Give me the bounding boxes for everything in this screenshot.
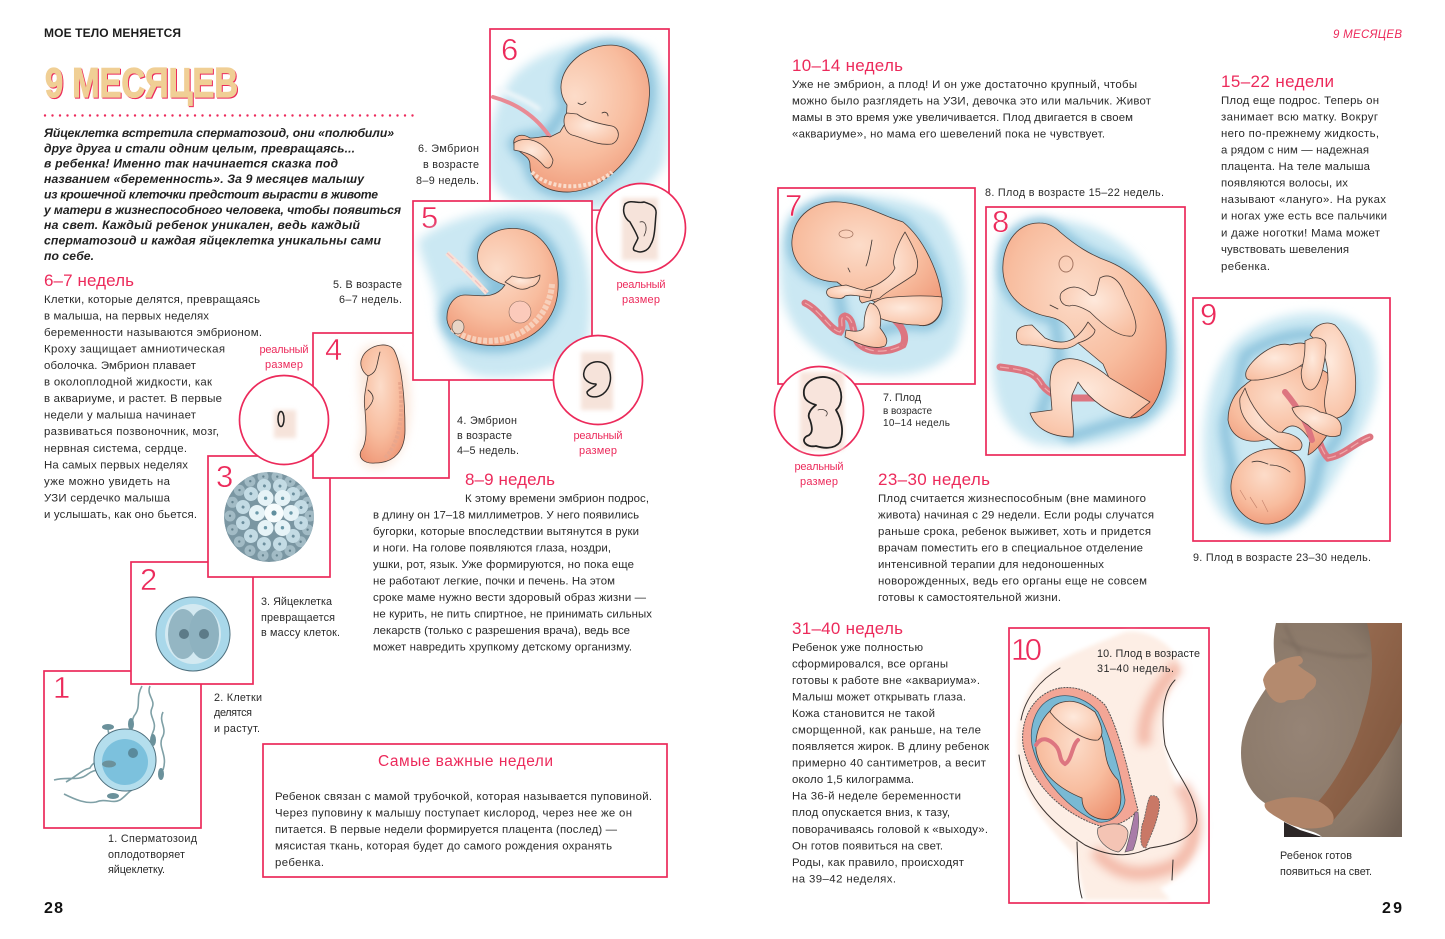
real size circle: fetus 7 xyxy=(774,366,864,456)
panel 8: fetus 15-22 weeks xyxy=(986,204,1185,455)
heading: 15-22 weeks: 15–22 недели xyxy=(1221,72,1334,91)
number 5: 5 xyxy=(421,200,438,235)
lower arm xyxy=(1016,322,1095,349)
caption 2: и растут. xyxy=(214,723,260,735)
text: 23-30 weeks xyxy=(878,493,1154,604)
text: 8-9 weeks: бугорки, которые впоследствии вытянутся в руки xyxy=(373,526,639,538)
text: 31-40 weeks: около 1,5 килограмма. xyxy=(792,774,914,786)
panel 6: embryo 8-9 weeks xyxy=(490,29,669,210)
caption 3: 3. Яйцеклетка xyxy=(261,596,332,608)
fetus legs and arms xyxy=(1246,343,1310,380)
text: 31-40 weeks: на 39–42 неделях. xyxy=(792,874,896,886)
real size label: embryo 5: размер xyxy=(579,445,617,457)
number 2: 2 xyxy=(140,562,157,597)
shirt xyxy=(1241,623,1402,837)
callout heading: Самые важные недели xyxy=(378,753,553,770)
photo caption xyxy=(1280,850,1372,878)
number 6: 6 xyxy=(501,32,518,67)
text: 23-30 weeks: интенсивной терапии для недоношенных xyxy=(878,559,1104,571)
caption 2: 2. Клетки xyxy=(214,692,262,704)
illustration: fetus 8 xyxy=(992,220,1178,446)
text: 23-30 weeks: живота) начиная с 29 недели. Если роды случатся xyxy=(878,510,1154,522)
caption 7: в возрасте xyxy=(883,406,932,417)
text: 6-7 weeks: беременности называются эмбрионом. xyxy=(44,327,262,339)
text: 6-7 weeks: в околоплодной жидкости, как xyxy=(44,376,213,388)
caption 1: 1. Сперматозоид xyxy=(108,833,198,845)
photo caption: Ребенок готов xyxy=(1280,850,1352,862)
real size label: embryo 6: размер xyxy=(622,294,660,306)
text: 10-14 weeks xyxy=(792,79,1152,140)
text: 8-9 weeks: не курить, не пить спиртное, не принимать сильных xyxy=(373,608,652,620)
panel 1: sperm and egg xyxy=(44,670,201,828)
umbilical cord xyxy=(805,303,905,351)
number 3: 3 xyxy=(216,459,233,494)
intro text: в ребенка! Именно так начинается сказка под xyxy=(44,157,338,171)
intro text: названием «беременность». За 9 месяцев малышу xyxy=(44,172,365,186)
caption 5: 6–7 недель. xyxy=(339,294,402,306)
text: 10-14 weeks: «аквариуме», но мама его шевелений пока не чувствует. xyxy=(792,128,1105,140)
real size circle: embryo 4 xyxy=(240,376,328,464)
text: 31-40 weeks xyxy=(792,642,990,886)
heading: 8-9 weeks: 8–9 недель xyxy=(465,470,555,489)
caption 3: в массу клеток. xyxy=(261,627,340,639)
text: 15-22 weeks: ребенка. xyxy=(1221,261,1270,273)
caption 4: 4. Эмбрион xyxy=(457,415,517,427)
callout text: мясистая ткань, которая будет до самого рождения охранять xyxy=(275,840,612,852)
illustration: embryo 4 xyxy=(359,345,410,468)
text: 15-22 weeks: него по-прежнему жидкость, xyxy=(1221,128,1379,140)
fetus body xyxy=(1003,223,1166,418)
text: 31-40 weeks: примерно 40 сантиметров, а весит xyxy=(792,758,987,770)
dotted divider xyxy=(45,114,420,117)
real size circle: embryo 5 xyxy=(554,336,642,424)
real size label: embryo 6 xyxy=(616,279,666,306)
text: 31-40 weeks: сформировался, все органы xyxy=(792,658,948,670)
real size label: embryo 4: реальный xyxy=(260,344,308,356)
text: 31-40 weeks: Малыш может открывать глаза. xyxy=(792,692,966,704)
real size label: fetus 7 xyxy=(794,461,844,488)
text: 31-40 weeks: появляется жирок. В длину ребенок xyxy=(792,741,990,753)
number 7: 7 xyxy=(785,188,802,223)
callout: most important weeks xyxy=(263,744,667,877)
page number 29: 29 xyxy=(1382,900,1402,917)
callout text: ребенка. xyxy=(275,857,324,869)
caption 7 xyxy=(883,392,950,429)
caption 4: в возрасте xyxy=(457,430,512,442)
intro text: друг друга и стали одним целым, превращаясь... xyxy=(44,141,355,155)
heading: 31-40 weeks: 31–40 недель xyxy=(792,619,903,638)
number 1: 1 xyxy=(53,670,70,705)
panel 9: fetus 23-30 weeks xyxy=(1193,297,1390,541)
caption 3: превращается xyxy=(261,612,335,624)
text: 6-7 weeks: развиваться позвоночник, мозг, xyxy=(44,426,219,438)
callout text xyxy=(275,791,652,869)
number 9: 9 xyxy=(1200,297,1217,332)
text: 15-22 weeks: и ногах уже есть все пальчики xyxy=(1221,210,1387,222)
real size circle: embryo 6 xyxy=(596,184,686,272)
text: 15-22 weeks: чувствовать шевеления xyxy=(1221,244,1349,256)
intro text: на свет. Каждый ребенок уникален, ведь каждый xyxy=(44,218,361,232)
text: 6-7 weeks: и услышать, как оно бьется. xyxy=(44,509,197,521)
text: 6-7 weeks: Кроху защищает амниотическая xyxy=(44,344,225,356)
caption 4: 4–5 недель. xyxy=(457,445,519,457)
fetus head xyxy=(1231,449,1305,524)
real size label: embryo 5: реальный xyxy=(574,430,622,442)
caption 10: 10. Плод в возрасте xyxy=(1097,648,1200,660)
intro text: из крошечной клеточки предстоит вырасти в животе xyxy=(44,187,378,201)
real size label: embryo 6: реальный xyxy=(616,279,666,291)
panel 7: fetus 10-14 weeks xyxy=(778,188,975,384)
text: 6-7 weeks: недели у малыша начинает xyxy=(44,410,197,422)
umbilical cord xyxy=(1000,367,1095,398)
caption 2: делятся xyxy=(214,707,252,719)
panel 5: embryo 6-7 weeks xyxy=(413,200,592,380)
illustration: egg xyxy=(54,686,164,803)
caption 7: 7. Плод xyxy=(883,392,922,404)
text: 15-22 weeks: называют «лануго». На руках xyxy=(1221,194,1386,206)
text: 8-9 weeks xyxy=(373,493,652,654)
text: 10-14 weeks: мамы в это время уже увеличивается. Плод двигается в своем xyxy=(792,112,1133,124)
text: 31-40 weeks: Кожа становится не такой xyxy=(792,708,935,720)
text: 6-7 weeks xyxy=(44,294,262,521)
heading: 10-14 weeks: 10–14 недель xyxy=(792,56,903,75)
photo: pregnant woman xyxy=(1241,623,1402,837)
panel 10: fetus 31-40 weeks xyxy=(1009,628,1209,903)
caption 10 xyxy=(1097,648,1200,675)
organs xyxy=(1141,796,1160,848)
text: 31-40 weeks: поворачиваясь головой к «выходу». xyxy=(792,824,988,836)
caption 8: 8. Плод в возрасте 15–22 недель. xyxy=(985,187,1164,199)
real size label: fetus 7: реальный xyxy=(794,461,844,473)
leg xyxy=(1030,359,1150,437)
illustration: dividing cell xyxy=(156,597,230,671)
caption 3 xyxy=(261,596,340,639)
illustration: embryo 6 xyxy=(490,40,669,210)
text: 15-22 weeks: и даже ноготки! Мама может xyxy=(1221,228,1381,240)
caption 7: 10–14 недель xyxy=(883,418,950,429)
illustration: pregnant cross-section xyxy=(1017,632,1197,900)
real size label: embryo 4 xyxy=(260,344,308,371)
text: 10-14 weeks: можно было разглядеть на УЗИ, девочка это или мальчик. Живот xyxy=(792,96,1152,108)
text: 15-22 weeks: занимает всю матку. Вокруг xyxy=(1221,112,1378,124)
intro text: у матери в жизнеспособного человека, чтобы появиться xyxy=(43,203,401,217)
callout text: питается. В первые недели формируется плацента (послед) — xyxy=(275,824,618,836)
number 10: 10 xyxy=(1011,632,1042,667)
page number 28: 28 xyxy=(44,900,63,917)
text: 6-7 weeks: УЗИ сердечко малыша xyxy=(44,492,171,504)
text: 8-9 weeks: К этому времени эмбрион подрос, xyxy=(465,493,649,505)
lower hand xyxy=(1265,797,1334,828)
intro text: по себе. xyxy=(44,249,94,263)
caption 1: яйцеклетку. xyxy=(108,864,165,876)
text: 6-7 weeks: Клетки, которые делятся, превращаясь xyxy=(44,294,260,306)
intro text: Яйцеклетка встретила сперматозоид, они «полюбили» xyxy=(43,126,394,140)
text: 23-30 weeks: Плод считается жизнеспособным (вне маминого xyxy=(878,493,1146,505)
text: 15-22 weeks: появляются волосы, их xyxy=(1221,178,1348,190)
callout text: Через пуповину к малышу поступает кислород, через нее же он xyxy=(275,808,632,820)
arm xyxy=(1314,623,1402,822)
text: 15-22 weeks: Плод еще подрос. Теперь он xyxy=(1221,95,1379,107)
upper hand xyxy=(1263,656,1316,703)
fetus body xyxy=(792,202,942,326)
title: 9 МЕСЯЦЕВ xyxy=(45,59,238,106)
panel 3: mass of cells xyxy=(208,456,330,577)
caption 1: оплодотворяет xyxy=(108,849,185,861)
fetus torso xyxy=(1228,366,1338,455)
illustration: morula xyxy=(224,471,316,562)
intro text xyxy=(43,126,401,263)
text: 6-7 weeks: в аквариуме, и растет. В первые xyxy=(44,393,222,405)
caption 6: 8–9 недель. xyxy=(416,175,479,187)
text: 6-7 weeks: в малыша, на первых неделях xyxy=(44,310,209,322)
text: 10-14 weeks: Уже не эмбрион, а плод! И он уже достаточно крупный, чтобы xyxy=(792,79,1137,91)
text: 6-7 weeks: На самых первых неделях xyxy=(44,460,188,472)
text: 8-9 weeks: лекарств (только с разрешения врача), ведь все xyxy=(373,625,630,637)
umbilical cord xyxy=(1318,434,1374,462)
text: 23-30 weeks: новорожденных, ведь его органы еще не совсем xyxy=(878,576,1147,588)
text: 6-7 weeks: уже можно увидеть на xyxy=(44,476,171,488)
text: 23-30 weeks: врачам поместить его в специальное отделение xyxy=(878,542,1143,554)
illustration: fetus 9 xyxy=(1204,313,1377,534)
heading: 23-30 weeks: 23–30 недель xyxy=(878,470,990,489)
text: 6-7 weeks: оболочка. Эмбрион плавает xyxy=(44,360,197,372)
callout text: Ребенок связан с мамой трубочкой, которая называется пуповиной. xyxy=(275,791,652,803)
caption 1 xyxy=(108,833,198,876)
text: 8-9 weeks: сроке маме нужно вести здоровый образ жизни — xyxy=(373,592,647,604)
real size label: fetus 7: размер xyxy=(800,476,838,488)
upper arm xyxy=(1060,276,1136,336)
running header right: 9 МЕСЯЦЕВ xyxy=(1333,29,1402,41)
illustration: fetus 7 xyxy=(780,196,965,375)
running header: МОЕ ТЕЛО МЕНЯЕТСЯ xyxy=(44,26,181,40)
text: 8-9 weeks: может навредить хрупкому детскому организму. xyxy=(373,642,632,654)
caption 6: 6. Эмбрион xyxy=(418,143,479,155)
heading: 6-7 weeks: 6–7 недель xyxy=(44,271,134,290)
caption 5: 5. В возрасте xyxy=(333,279,402,291)
text: 23-30 weeks: раньше срока, ребенок выживет, хоть и придется xyxy=(878,526,1151,538)
text: 31-40 weeks: На 36-й неделе беременности xyxy=(792,790,961,802)
text: 31-40 weeks: сморщенной, как раньше, на теле xyxy=(792,724,981,736)
text: 23-30 weeks: готовы к самостоятельной жизни. xyxy=(878,592,1061,604)
text: 31-40 weeks: Роды, как правило, происходят xyxy=(792,857,965,869)
caption 5 xyxy=(333,279,402,306)
text: 31-40 weeks: плод опускается вниз, к тазу, xyxy=(792,807,950,819)
caption 2 xyxy=(214,692,262,735)
number 4: 4 xyxy=(325,332,342,367)
real size label: embryo 4: размер xyxy=(265,359,303,371)
fetus in uterus xyxy=(1036,702,1121,819)
text: 8-9 weeks: не работают легкие, почки и печень. На этом xyxy=(373,576,615,588)
caption 4 xyxy=(457,415,519,457)
caption 6: в возрасте xyxy=(423,159,479,171)
text: 8-9 weeks: в длину он 17–18 миллиметров. У него появились xyxy=(373,510,639,522)
photo caption: появиться на свет. xyxy=(1280,866,1372,878)
caption 6 xyxy=(416,143,479,187)
shirt folds xyxy=(1282,625,1368,656)
pants xyxy=(1284,822,1322,837)
text: 31-40 weeks: Он готов появиться на свет. xyxy=(792,840,943,852)
text: 6-7 weeks: нервная система, сердце. xyxy=(44,443,187,455)
text: 31-40 weeks: Ребенок уже полностью xyxy=(792,642,923,654)
panel 4: embryo 4-5 weeks xyxy=(313,332,449,478)
text: 8-9 weeks: ушки, рот, язык. Уже формируются, но пока еще xyxy=(373,559,634,571)
number 8: 8 xyxy=(992,204,1009,239)
real size label: embryo 5 xyxy=(574,430,622,457)
illustration: embryo 5 xyxy=(418,208,591,378)
text: 8-9 weeks: и ноги. На голове появляются глаза, ноздри, xyxy=(373,542,611,554)
text: 15-22 weeks: плацента. На теле малыша xyxy=(1221,161,1371,173)
caption 9: 9. Плод в возрасте 23–30 недель. xyxy=(1193,552,1371,564)
caption 10: 31–40 недель. xyxy=(1097,663,1174,675)
text: 31-40 weeks: готовы к работе вне «аквариума». xyxy=(792,675,980,687)
uterus xyxy=(1023,688,1138,826)
text: 15-22 weeks: а рядом с ним — надежная xyxy=(1221,144,1369,156)
text: 15-22 weeks xyxy=(1221,95,1387,273)
intro text: сперматозоид и каждая яйцеклетка уникальны сами xyxy=(44,234,382,248)
panel 2: two cells xyxy=(131,562,253,684)
